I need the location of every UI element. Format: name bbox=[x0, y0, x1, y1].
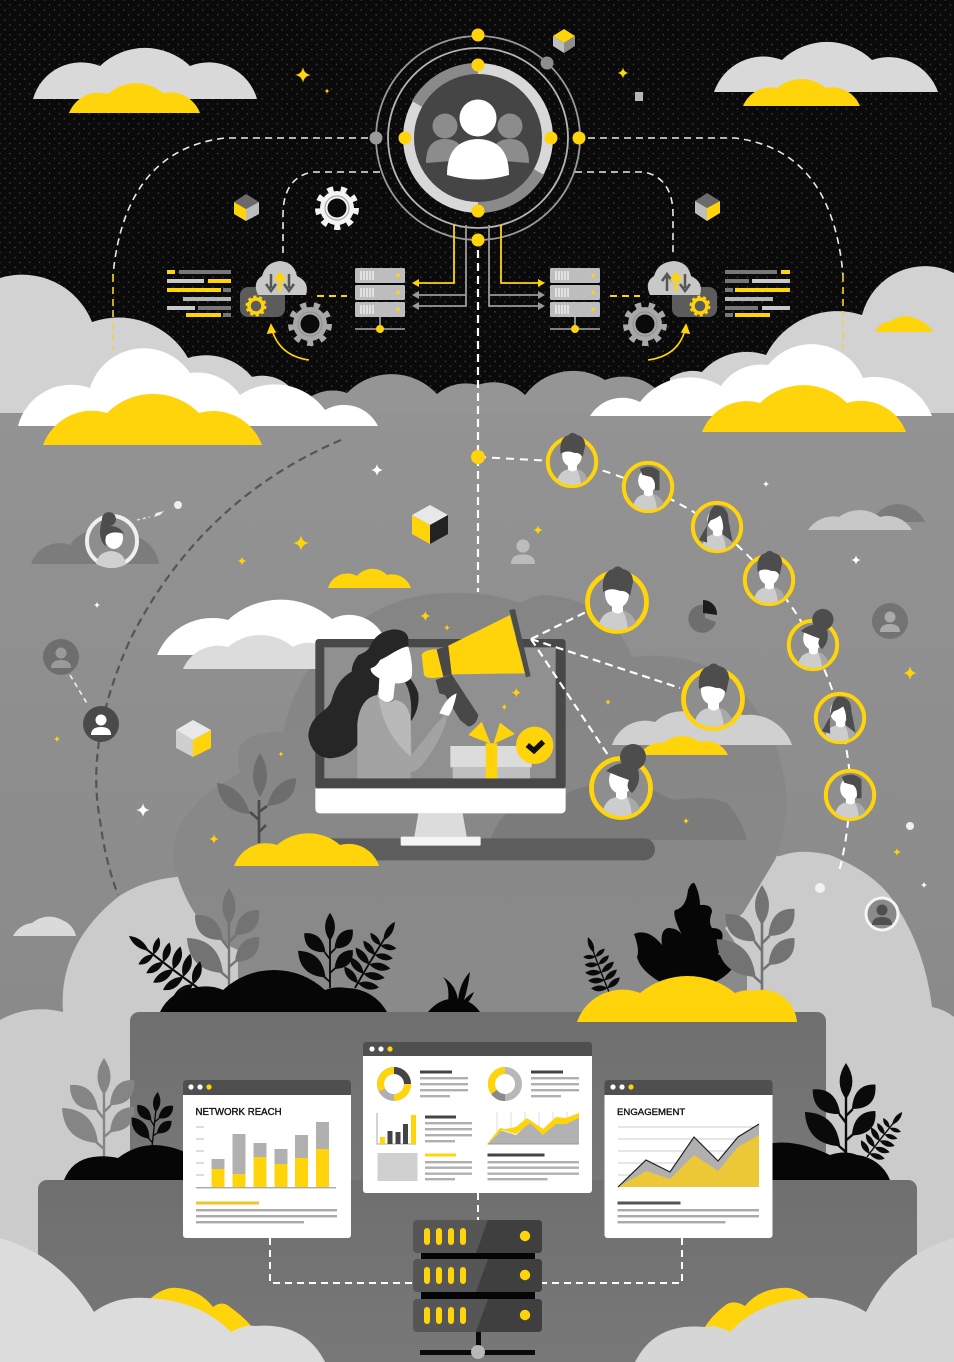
cube: left bbox=[176, 720, 211, 757]
monitor screen bbox=[324, 647, 556, 778]
avatar bbox=[624, 463, 672, 513]
avatar bbox=[548, 433, 596, 488]
monitor body bbox=[315, 639, 566, 789]
presenter hair bbox=[308, 629, 419, 758]
cube: left bbox=[234, 194, 259, 221]
mini bar chart bbox=[377, 1113, 416, 1144]
sparkles bbox=[420, 611, 521, 710]
text lines bbox=[425, 1116, 472, 1142]
gear: left grey bbox=[291, 305, 329, 343]
garden left bbox=[115, 888, 480, 1012]
yellow cloud below monitor bbox=[234, 833, 379, 866]
check badge bbox=[516, 727, 553, 764]
cloud sync icon left bbox=[240, 261, 307, 317]
stars on mid ground bbox=[54, 464, 927, 893]
server rack left bbox=[355, 268, 405, 333]
top left cloud bbox=[33, 48, 257, 113]
small cube bbox=[635, 92, 643, 101]
small yellow cloud bbox=[328, 569, 411, 588]
small pie icon bbox=[688, 600, 717, 633]
stars in sky bbox=[295, 67, 629, 94]
monitor chin bbox=[315, 788, 566, 813]
central hub with audience icon bbox=[370, 28, 586, 246]
megaphone bbox=[422, 609, 531, 727]
bottom right cloud bbox=[635, 1238, 954, 1362]
panel: engagement bbox=[604, 1080, 772, 1238]
text lines bbox=[420, 1070, 579, 1097]
cloud behind avatar bbox=[612, 711, 792, 755]
curved arrow right bbox=[648, 325, 689, 360]
panel: central dashboard bbox=[363, 1042, 592, 1193]
avatar large bbox=[684, 664, 742, 731]
garden lower right bbox=[760, 1063, 914, 1180]
small light cloud bbox=[13, 917, 76, 936]
avatar large bbox=[592, 744, 650, 820]
monitor stand bbox=[414, 813, 467, 837]
area chart bbox=[618, 1124, 759, 1187]
area chart bbox=[488, 1112, 579, 1144]
yellow hill over platform bbox=[577, 976, 797, 1022]
presenter collar bbox=[378, 697, 411, 757]
platform tier lower bbox=[38, 1180, 917, 1362]
presenter face bbox=[371, 647, 412, 702]
avatar bbox=[745, 551, 793, 606]
caption lines bbox=[196, 1202, 337, 1223]
dashed network links bbox=[113, 138, 843, 592]
right yellow dashes above cloud bbox=[842, 275, 844, 315]
caption lines bbox=[618, 1202, 759, 1223]
log lines left bbox=[167, 270, 231, 317]
gift box bbox=[450, 722, 532, 778]
avatar bbox=[816, 694, 864, 744]
monitor with presenter bbox=[308, 609, 655, 860]
left orbit dashed arc bbox=[96, 440, 341, 895]
cloud behind monitor bbox=[157, 600, 385, 669]
server stack bbox=[413, 1220, 542, 1359]
cube: right bbox=[695, 193, 720, 221]
broadcast links from megaphone bbox=[531, 612, 680, 755]
bar chart bbox=[196, 1122, 336, 1188]
donut chart bbox=[380, 1070, 408, 1098]
bottom left cloud bbox=[0, 1238, 325, 1362]
cube: mid bbox=[412, 505, 448, 544]
heading: ENGAGEMENT bbox=[617, 1107, 685, 1118]
curved arrow left bbox=[268, 325, 309, 360]
backdrop hills behind monitor bbox=[173, 593, 787, 1014]
panel: network reach bbox=[183, 1080, 351, 1238]
garden lower left bbox=[62, 1058, 190, 1180]
top right cloud bbox=[714, 42, 938, 106]
dashed connectors to server bbox=[270, 1193, 682, 1283]
bottom light hills bbox=[0, 852, 954, 1362]
donut chart bbox=[491, 1070, 518, 1098]
avatar bbox=[789, 609, 837, 671]
text lines bbox=[425, 1154, 579, 1180]
gear: right grey bbox=[626, 305, 664, 343]
arc of followers path bbox=[478, 457, 850, 875]
log lines right bbox=[725, 270, 790, 317]
presenter body bbox=[357, 695, 447, 778]
platform tier upper bbox=[130, 1012, 826, 1192]
cube: top right of hub bbox=[553, 29, 575, 53]
shadow bar bbox=[320, 838, 655, 860]
garden right bbox=[574, 883, 795, 998]
server rack right bbox=[550, 268, 600, 333]
avatar bbox=[826, 771, 874, 821]
sprout plant by monitor bbox=[217, 753, 296, 843]
left cloud with avatar bbox=[31, 501, 182, 568]
arc origin dot bbox=[471, 450, 485, 464]
right big cloud bank bbox=[590, 266, 954, 432]
image placeholder bbox=[378, 1153, 418, 1181]
gear: white bbox=[318, 189, 356, 227]
connector arrows to servers bbox=[412, 225, 545, 310]
cloud sync icon right bbox=[648, 261, 717, 317]
avatar bbox=[693, 503, 741, 553]
right light clouds bbox=[808, 504, 925, 530]
avatar large bbox=[588, 566, 646, 634]
left big cloud bank bbox=[0, 275, 378, 445]
user badges bbox=[43, 539, 908, 930]
left yellow dashes above cloud bbox=[112, 275, 114, 310]
heading: NETWORK REACH bbox=[196, 1107, 282, 1118]
